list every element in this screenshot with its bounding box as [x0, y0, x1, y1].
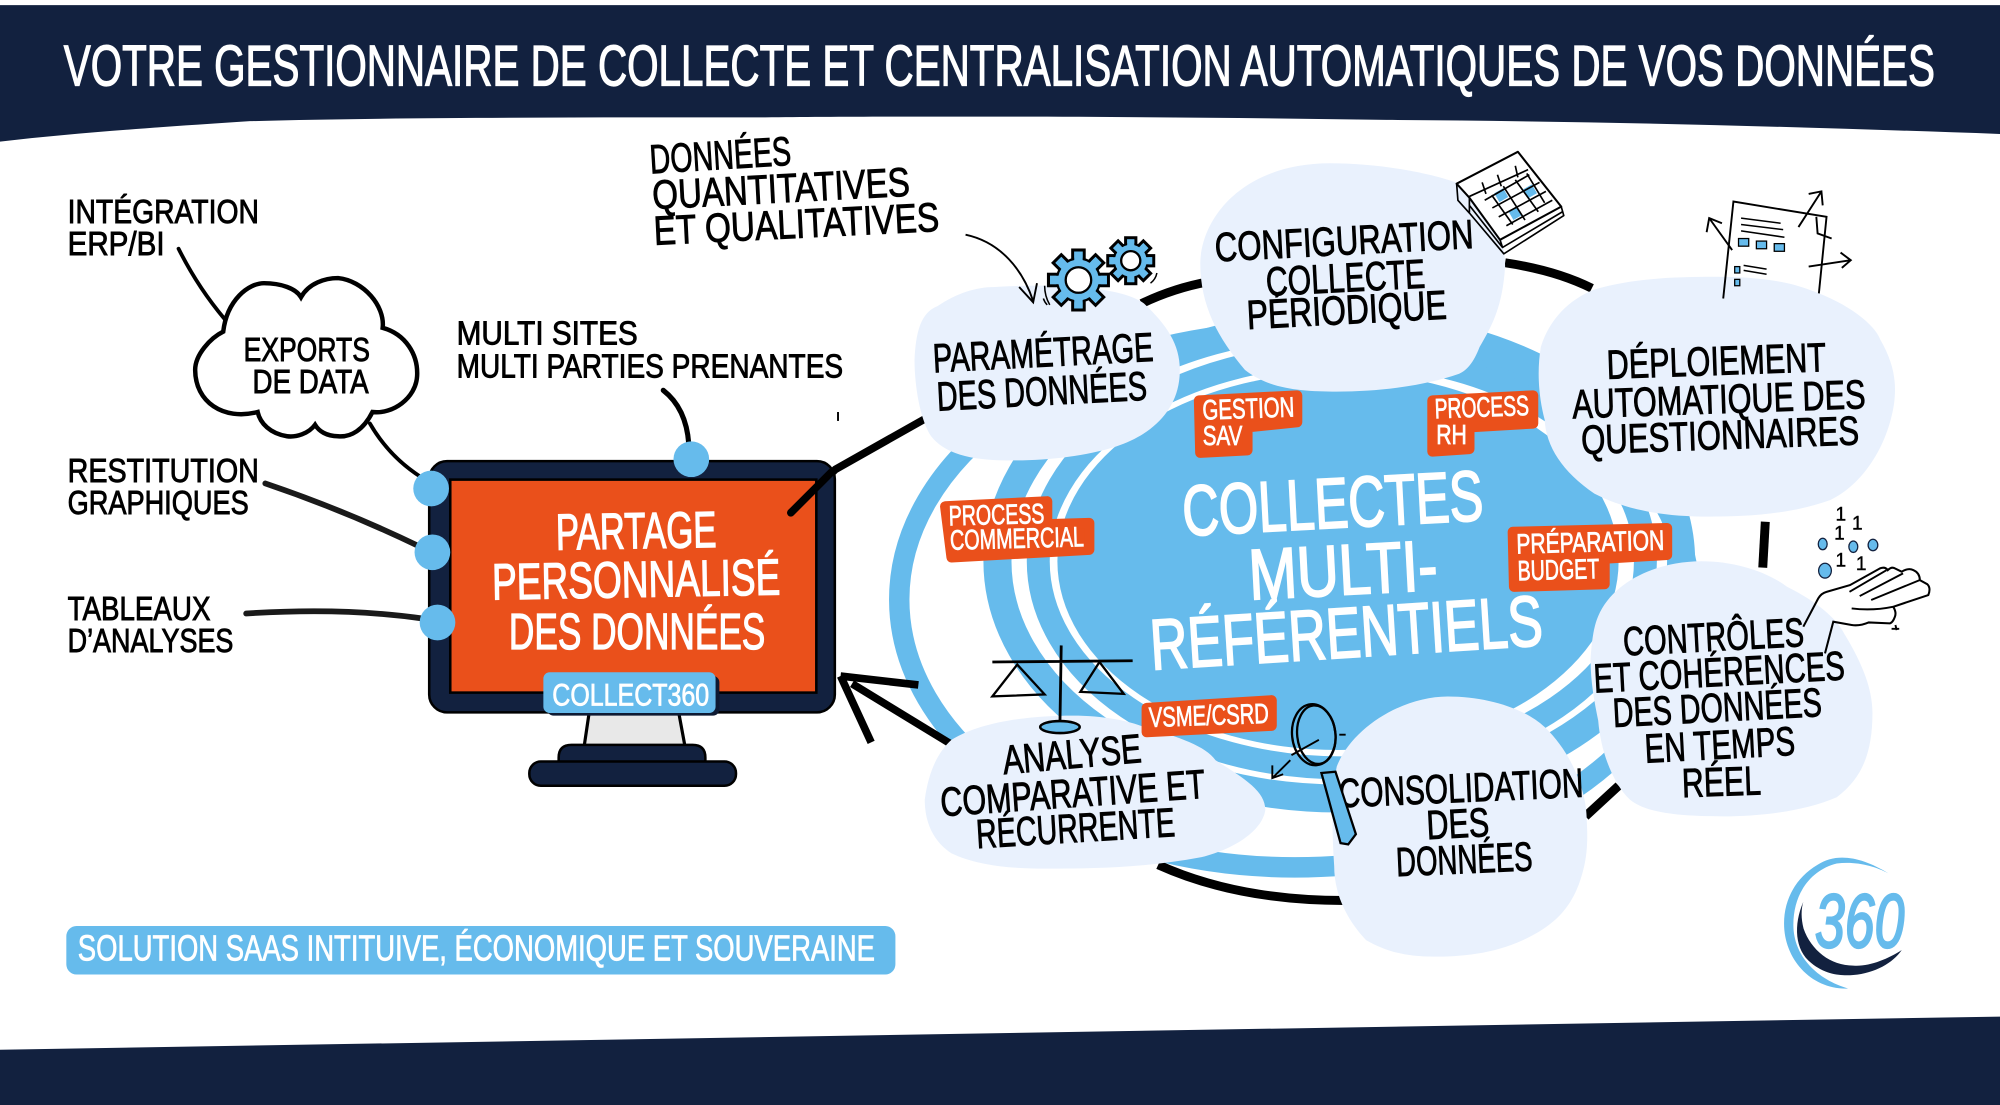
tag: préparation budget [1513, 525, 1667, 587]
icon: scales [992, 645, 1133, 733]
bubble: contrôles et cohérences: DES DONNÉES [1612, 679, 1823, 736]
tag: process commercial [945, 498, 1089, 557]
cloud: exports de data: DE DATA [253, 364, 369, 401]
tag: process rh: PROCESS [1434, 390, 1529, 424]
icon: magnifying glass [1272, 702, 1356, 844]
tag: process commercial: PROCESS [948, 498, 1045, 532]
footer band [0, 1017, 2000, 1105]
label: multi sites: MULTI PARTIES PRENANTES [457, 349, 843, 386]
label: restitution graphiques: GRAPHIQUES [68, 485, 249, 522]
bubble: contrôles et cohérences: RÉEL [1681, 757, 1762, 806]
bubble: paramétrage des données: PARAMÉTRAGE [932, 324, 1155, 381]
bubble: paramétrage des données: DES DONNÉES [936, 363, 1148, 420]
monitor frame [429, 461, 835, 712]
icon: hand with binary digits: 1 [1852, 513, 1863, 534]
label: restitution graphiques: RESTITUTION [68, 453, 259, 490]
concentric blue rings [899, 324, 1690, 867]
tag: préparation budget: PRÉPARATION [1516, 525, 1665, 560]
bubble: déploiement automatique: QUESTIONNAIRES [1580, 407, 1860, 463]
large gear [1048, 250, 1108, 310]
icon: hand with binary digits: 1 [1856, 554, 1867, 575]
bubble: contrôles et cohérences [1591, 561, 1872, 816]
bubble: analyse comparative: COMPARATIVE ET [939, 761, 1207, 825]
bubble: paramétrage des données [915, 286, 1180, 460]
badge: collect360 [543, 672, 719, 716]
center heading [1148, 456, 1545, 686]
bubble: configuration collecte périodique: COLLECTE [1265, 251, 1426, 305]
monitor stand [584, 712, 685, 746]
icon: hand with binary digits: 1 [1834, 524, 1845, 545]
center heading: MULTI- [1247, 526, 1439, 615]
icon: gears [1043, 238, 1157, 310]
cloud: exports de data: EXPORTS [244, 332, 370, 369]
label: données quantitatives et qualitatives: QUANTITATIVES [651, 159, 911, 218]
label: données quantitatives et qualitatives: DONNÉES [648, 128, 792, 182]
screen heading: DES DONNÉES [509, 603, 765, 660]
bubble: configuration collecte périodique: CONFIGURATION [1214, 211, 1475, 270]
logo 360 [1784, 858, 1904, 989]
badge: collect360: COLLECT360 [552, 676, 709, 712]
small gear [1108, 238, 1154, 284]
connector end on screen [791, 472, 832, 513]
center heading: RÉFÉRENTIELS [1148, 581, 1545, 686]
connector: screen to parameter bubble [791, 420, 923, 513]
label: intégration ERP/BI [68, 194, 259, 263]
header band [0, 5, 2000, 142]
tag: préparation budget: BUDGET [1517, 553, 1600, 586]
label: tableaux d'analyses: TABLEAUX [68, 591, 210, 628]
tag: gestion sav: GESTION [1202, 391, 1295, 426]
connector lines on the left [179, 249, 689, 619]
tag: process rh [1432, 390, 1533, 452]
cloud: exports de data [195, 278, 417, 436]
label: multi sites [457, 315, 843, 386]
label: restitution graphiques [68, 453, 259, 522]
label: tableaux d'analyses [68, 591, 233, 660]
bubble: contrôles et cohérences: CONTRÔLES [1622, 609, 1805, 665]
icon: calendar [1457, 152, 1564, 254]
icon: hand with binary digits [1803, 504, 1930, 653]
screen heading: PARTAGE [555, 501, 717, 561]
bubble: configuration collecte périodique [1200, 163, 1505, 392]
tag: gestion sav [1199, 391, 1297, 453]
connector dots on monitor [413, 441, 709, 640]
bubble: analyse comparative [925, 716, 1265, 869]
small stray mark [837, 412, 839, 421]
bubble: consolidation des données: CONSOLIDATION [1338, 760, 1584, 816]
bubble: configuration collecte périodique: PÉRIODIQUE [1246, 282, 1448, 338]
bubble: consolidation des données [1333, 696, 1587, 957]
tag: process rh: RH [1436, 419, 1467, 450]
curved arrow to parameter bubble [966, 235, 1037, 302]
bubble: consolidation des données: DES [1425, 799, 1490, 848]
label: tableaux d'analyses: D’ANALYSES [68, 623, 233, 660]
bubble: déploiement automatique: DÉPLOIEMENT [1606, 334, 1827, 388]
label: multi sites: MULTI SITES [457, 315, 638, 352]
label: données quantitatives et qualitatives: ET QUALITATIVES [653, 194, 940, 254]
bubble: contrôles et cohérences: EN TEMPS [1643, 718, 1796, 772]
solution banner: SOLUTION SAAS INTITUIVE, ÉCONOMIQUE ET SOUVERAINE [78, 928, 875, 968]
icon: document with arrows [1707, 191, 1851, 298]
bubble: consolidation des données: DONNÉES [1395, 833, 1533, 885]
black cycle arcs [1142, 263, 1765, 901]
bubble: déploiement automatique: AUTOMATIQUE DES [1571, 371, 1866, 427]
center heading: COLLECTES [1180, 456, 1485, 552]
monitor screen [450, 480, 816, 693]
tag: vsme/csrd [1147, 698, 1272, 733]
solution banner [66, 926, 895, 975]
screen heading: PERSONNALISÉ [492, 548, 781, 611]
arrow into the monitor [841, 676, 950, 744]
label: intégration ERP/BI: INTÉGRATION [68, 194, 259, 231]
bubble: analyse comparative: ANALYSE [1001, 725, 1143, 783]
tag: vsme/csrd: VSME/CSRD [1148, 698, 1269, 733]
screen heading [492, 501, 781, 660]
icon: hand with binary digits: 1 [1835, 504, 1846, 525]
bubble: contrôles et cohérences: ET COHÉRENCES [1592, 643, 1846, 702]
logo 360: 360 [1815, 880, 1904, 965]
bubble: déploiement automatique [1539, 277, 1895, 517]
label: intégration ERP/BI: ERP/BI [68, 226, 165, 263]
monitor base [559, 745, 705, 763]
tag: process commercial: COMMERCIAL [950, 521, 1084, 556]
bubble: analyse comparative: RÉCURRENTE [975, 799, 1176, 857]
monitor [429, 461, 835, 786]
tag: gestion sav: SAV [1203, 420, 1243, 451]
label: données quantitatives et qualitatives [648, 128, 940, 254]
icon: hand with binary digits: 1 [1835, 550, 1846, 571]
